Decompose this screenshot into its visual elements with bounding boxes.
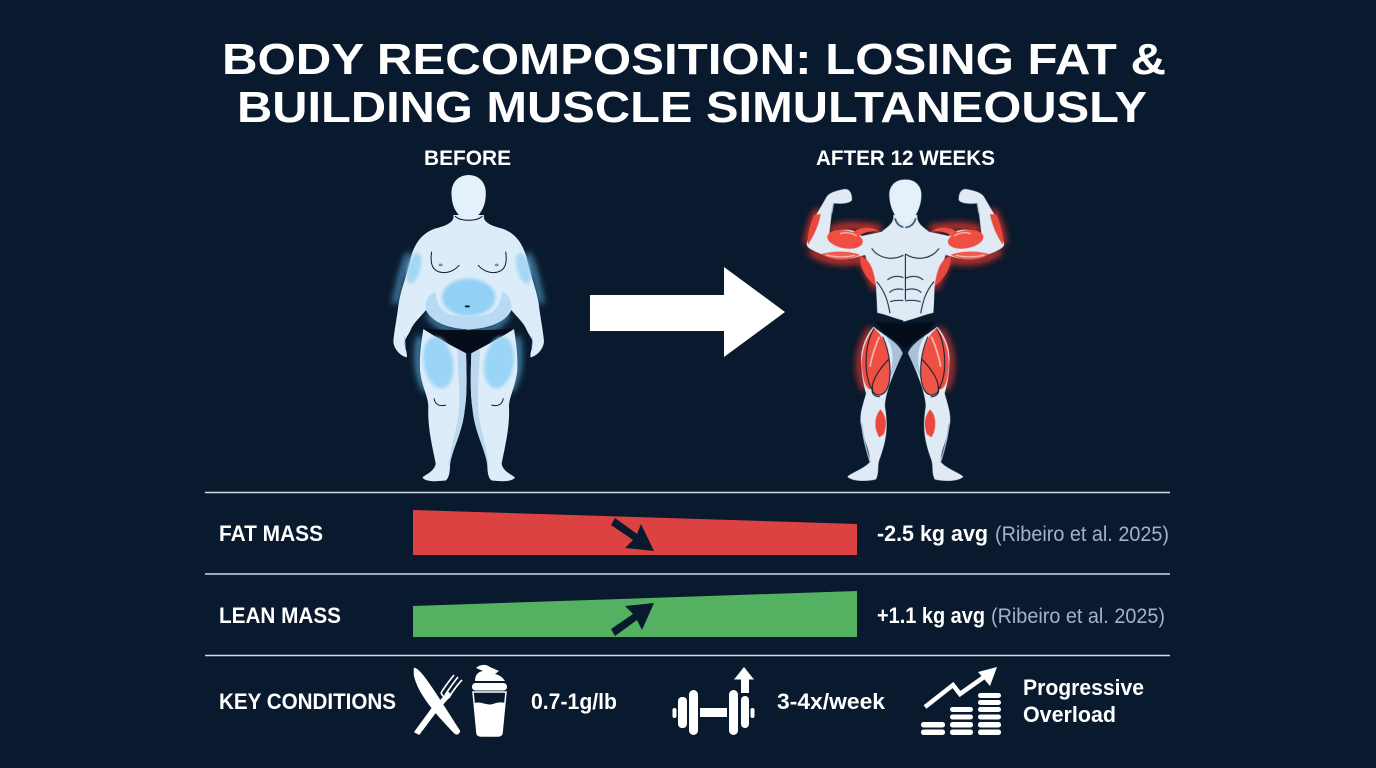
title xyxy=(222,35,1166,132)
icon: progress chart xyxy=(921,667,1001,735)
bar: fat mass decreasing xyxy=(413,510,857,555)
citation: fat mass: (Ribeiro et al. 2025) xyxy=(995,523,1169,546)
value: lean mass: +1.1 kg avg xyxy=(877,603,985,628)
value: progressive overload xyxy=(1023,675,1144,727)
value: fat mass: -2.5 kg avg xyxy=(877,521,988,546)
heading: before: BEFORE xyxy=(424,147,511,170)
title: BODY RECOMPOSITION: LOSING FAT & xyxy=(222,35,1166,84)
figure: before body xyxy=(393,175,544,481)
title: BUILDING MUSCLE SIMULTANEOUSLY xyxy=(237,83,1147,132)
label: key conditions: KEY CONDITIONS xyxy=(219,689,396,714)
figure: after body xyxy=(807,179,1004,481)
arrow: before to after xyxy=(590,267,785,357)
value: protein: 0.7-1g/lb xyxy=(531,689,617,714)
icon: protein shaker xyxy=(472,665,507,736)
heading: after 12 weeks: AFTER 12 WEEKS xyxy=(816,147,995,170)
icon: dumbbell with up arrow xyxy=(672,667,754,735)
label: lean mass: LEAN MASS xyxy=(219,603,341,628)
citation: lean mass: (Ribeiro et al. 2025) xyxy=(991,605,1165,628)
label: fat mass: FAT MASS xyxy=(219,521,323,546)
icon: knife and fork xyxy=(414,668,462,734)
value: progressive overload: Progressive xyxy=(1023,675,1144,700)
divider lines xyxy=(205,492,1170,656)
arrow: down xyxy=(611,518,654,551)
value: progressive overload: Overload xyxy=(1023,702,1116,727)
bar: lean mass increasing xyxy=(413,591,857,637)
row: lean mass xyxy=(219,591,1165,637)
arrow: up xyxy=(611,603,654,636)
row: fat mass xyxy=(219,510,1169,555)
value: frequency: 3-4x/week xyxy=(777,689,886,714)
